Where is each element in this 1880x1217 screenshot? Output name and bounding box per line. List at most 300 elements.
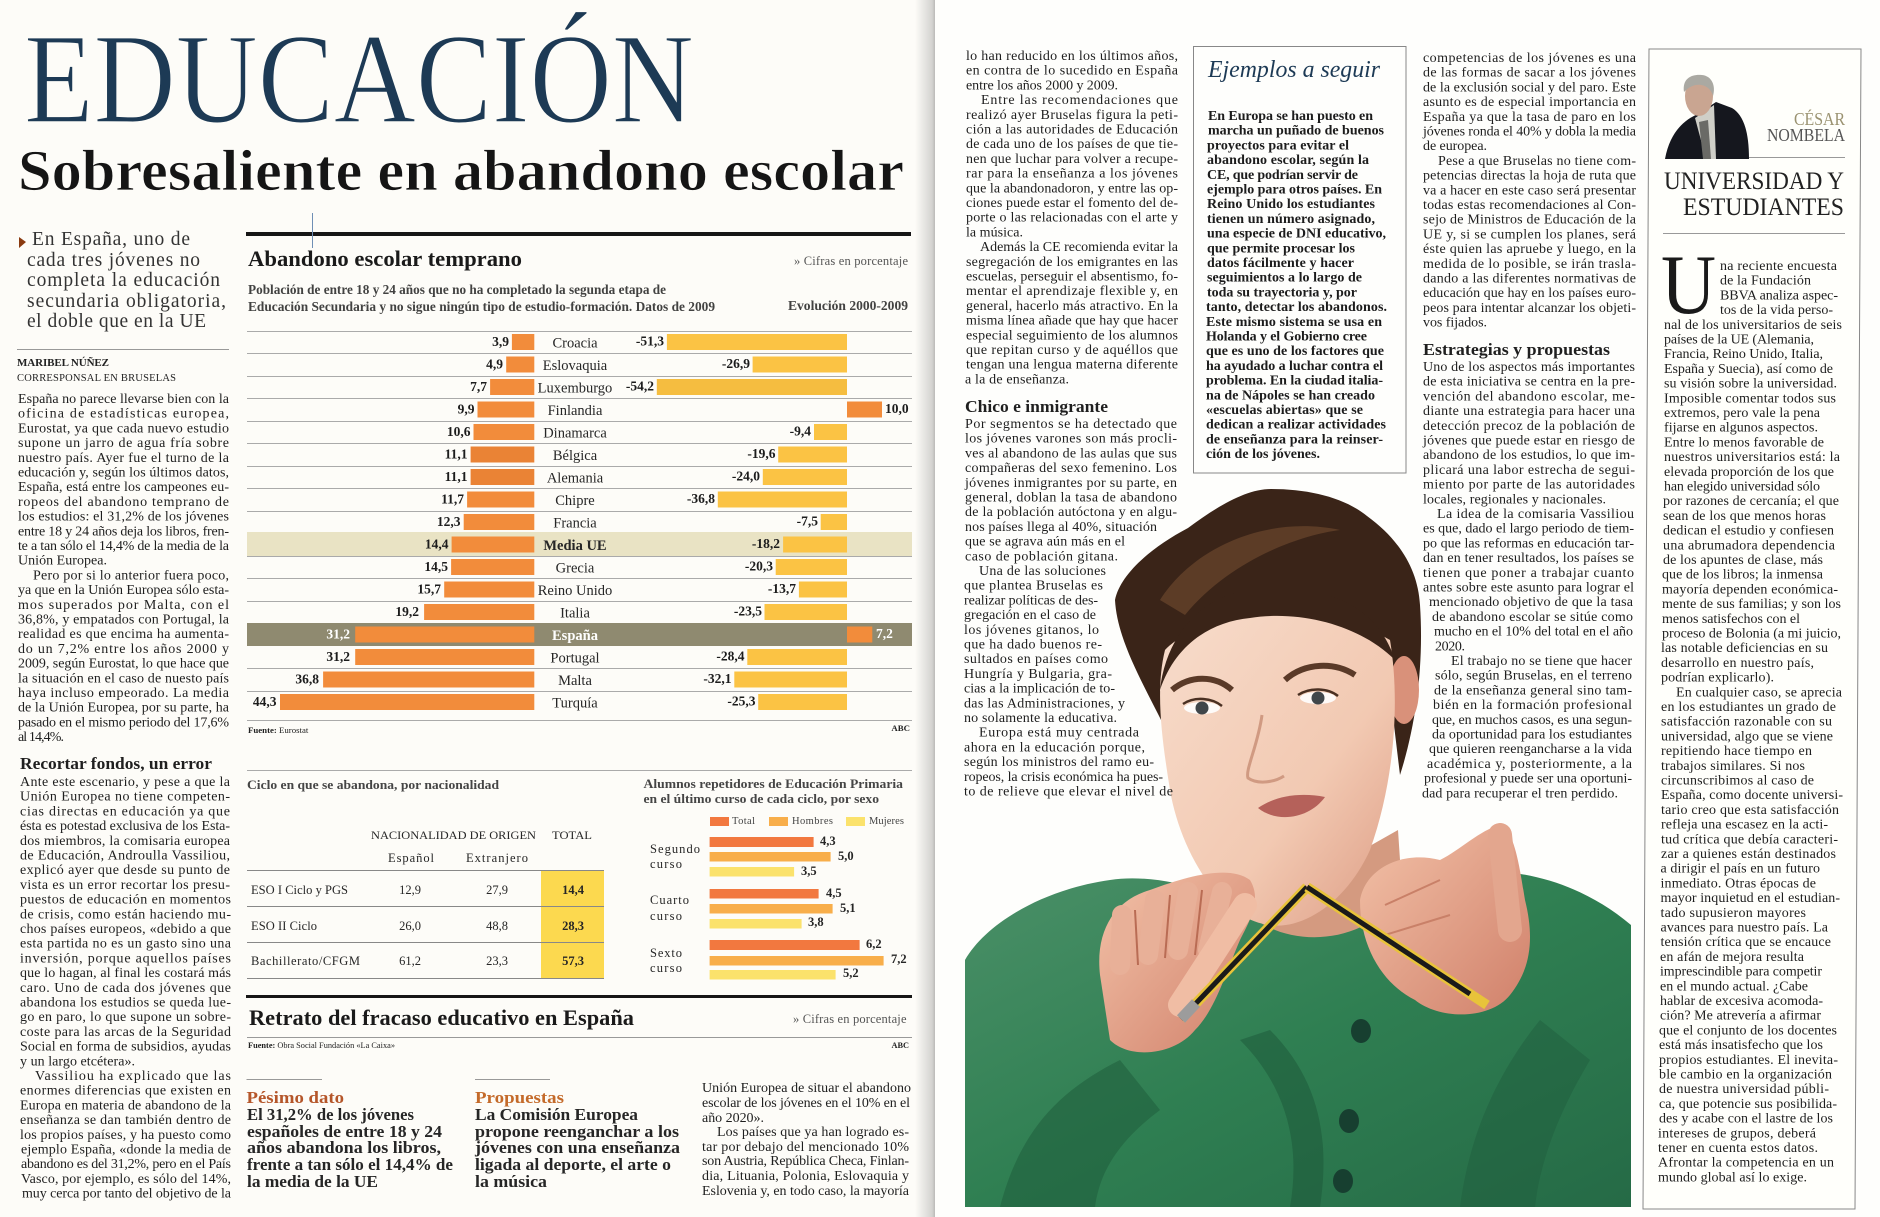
article column 1: los estudios: el 31,2% de los jóvenes: [18, 510, 229, 525]
section heading: retrato del fracaso: ABC: [891, 1041, 909, 1050]
bar chart: abandono escolar temprano: -54,2: [626, 378, 654, 394]
bar chart: abandono escolar temprano: Eslovaquia: [543, 358, 608, 374]
article column 2 continued: Hungría y Bulgaria, gra-: [964, 667, 1112, 682]
legend: Hombres: [792, 816, 833, 827]
article column 1 continued: enseñanza se dan también dentro de: [20, 1113, 231, 1128]
article column 1 continued: ejemplo España, «donde la media de: [21, 1142, 231, 1158]
section heading: retrato del fracaso: » Cifras en porcentaje: [793, 1012, 907, 1026]
article column 3: educación que hay en los países euro-: [1423, 286, 1636, 301]
bar chart: abandono escolar temprano: 14,4: [425, 536, 449, 552]
article column 3 continued: locales, regionales y nacionales.: [1423, 492, 1606, 507]
article column 2: en contra de lo sucedido en España: [966, 64, 1179, 79]
bar chart: abandono escolar temprano: 7,2: [876, 626, 893, 641]
callout: pésimo dato: años abandona los libros,: [247, 1138, 441, 1157]
article column 2 continued: cias a la implicación de to-: [964, 682, 1115, 697]
opinion text: na reciente encuesta: [1720, 259, 1838, 274]
callout: propuestas: ligada al deporte, el arte o: [475, 1155, 671, 1174]
source note: Fuente: Eurostat: [248, 725, 309, 735]
article column 1 continued: Ante este escenario, y pese a que la: [20, 775, 231, 790]
table: ciclo por nacionalidad: 26,0: [399, 919, 421, 933]
bar chart: abandono escolar temprano: -23,5: [734, 604, 762, 618]
chart header: Educación Secundaria y no sigue ningún tipo de estudio-formación. Datos de 2009: [248, 299, 715, 314]
article column 3 continued: profesional y puede ser una oportuni-: [1424, 772, 1632, 787]
panel: Ejemplos a seguir: seguimientos a lo largo de: [1207, 271, 1362, 286]
opinion text: mundo global así lo exige.: [1658, 1170, 1807, 1185]
opinion text: fijarse en algunos aspectos.: [1664, 421, 1818, 436]
article column 3: de la exclusión social y del paro. Este: [1423, 80, 1636, 95]
callout: propuestas: la música: [475, 1172, 547, 1191]
article column 3 continued: vención del abandono escolar, me-: [1423, 389, 1635, 404]
icon: bullet arrow: [19, 237, 26, 248]
article column 3 continued: mucho en el 10% del total en el año: [1434, 625, 1633, 640]
intro summary: [19, 229, 226, 332]
chart header: Abandono escolar temprano: [248, 246, 522, 271]
panel: Ejemplos a seguir: ejemplo para otros países. En: [1207, 182, 1382, 198]
bar chart: abandono escolar temprano: -32,1: [703, 671, 732, 686]
bar chart: alumnos repetidores: 4,5: [826, 886, 842, 900]
bar chart: abandono escolar temprano: 15,7: [417, 582, 441, 596]
callout: pésimo dato: frente a tan sólo el 14,4% de: [247, 1155, 453, 1174]
article column 1 continued: y un largo etcétera».: [20, 1054, 135, 1069]
panel: Ejemplos a seguir: de enseñanza para la reinser-: [1206, 432, 1383, 447]
article column 2: general, hacerlo más atractivo. En la: [966, 299, 1179, 314]
article column 1 continued: enormes diferencias que existen en: [20, 1084, 231, 1099]
article column 3: asunto es de especial importancia en: [1423, 95, 1636, 110]
photo: student snapping a pencil: [965, 489, 1631, 1207]
opinion text: Francia, Reino Unido, Italia,: [1664, 347, 1823, 362]
panel: Ejemplos a seguir: datos fácilmente y hacer: [1207, 256, 1354, 271]
article column 1 continued: Vasco, por ejemplo, es sólo del 14%,: [21, 1172, 231, 1187]
nose: [1248, 715, 1284, 782]
opinion text: su visión sobre la universidad.: [1664, 377, 1837, 392]
article column 2 continued: [964, 417, 1177, 800]
bar chart: abandono escolar temprano: -9,4: [790, 424, 811, 438]
bar chart: abandono escolar temprano: -7,5: [797, 514, 818, 528]
article column 3: vos fijados.: [1423, 316, 1487, 331]
table: ciclo por nacionalidad: ESO I Ciclo y PGS: [251, 883, 348, 897]
article column 3 continued: que, en muchos casos, es una segun-: [1432, 713, 1632, 728]
subtitle: Sobresaliente en abandono escolar: [18, 138, 904, 203]
article column 1: 2009, según Eurostat, lo que hace que: [18, 657, 229, 672]
heading: Chico e inmigrante: Chico e inmigrante: [965, 397, 1108, 416]
article column 3 continued: El trabajo no se tiene que hacer: [1451, 654, 1632, 669]
article column 3: sejo de Ministros de Educación de la: [1423, 213, 1637, 228]
bar chart: abandono escolar temprano: -18,2: [752, 536, 780, 551]
article text bottom right of left page: tar por debajo del mencionado 10%: [702, 1140, 909, 1155]
hair: [1115, 489, 1421, 775]
article column 3 continued: bién en la formación profesional: [1433, 698, 1632, 713]
article column 2 continued: das las Administraciones, y: [964, 696, 1125, 711]
article column 2: lo han reducido en los últimos años,: [966, 49, 1178, 64]
opinion text: mente de sus familias; y son los: [1662, 597, 1841, 612]
callout: pésimo dato: El 31,2% de los jóvenes: [247, 1105, 415, 1124]
article column 2 continued: los jóvenes gitanos, lo: [964, 623, 1099, 638]
bar chart: alumnos repetidores: en el último curso de cada ciclo, por sexo: [644, 791, 879, 806]
bar chart: abandono escolar temprano: 11,7: [441, 492, 464, 506]
article column 1 continued: chos países europeos, «debido a que: [20, 922, 231, 937]
article column 1 continued: ésta es potestad exclusiva de los Esta-: [20, 819, 230, 834]
article column 1: Unión Europea.: [18, 554, 107, 569]
bar chart: abandono escolar temprano: -36,8: [687, 491, 715, 506]
chart header: [246, 213, 911, 314]
opinion text: está más insatisfecho que los: [1659, 1038, 1823, 1053]
bar chart: alumnos repetidores: Cuarto: [650, 893, 689, 907]
article text bottom right of left page: Unión Europea de situar el abandono: [702, 1081, 911, 1096]
article text bottom right of left page: dia, Lituania, Polonia, Eslovaquia y: [702, 1169, 909, 1184]
panel: Ejemplos a seguir: abandono escolar, según la: [1207, 153, 1369, 168]
callout: propuestas: jóvenes con una enseñanza: [474, 1138, 680, 1157]
bar chart: abandono escolar temprano: -20,3: [745, 558, 773, 574]
byline: CORRESPONSAL EN BRUSELAS: [17, 373, 176, 384]
panel: Ejemplos a seguir: problema. En la ciudad italia-: [1206, 374, 1383, 389]
hair fringe: [1160, 589, 1395, 690]
article column 3: medida de lo posible, se irán trasla-: [1423, 257, 1636, 272]
opinion text: tener en cuenta estos datos.: [1658, 1141, 1818, 1156]
article column 2: misma línea añade que hay que hacer: [966, 314, 1178, 329]
opinion text: intereses de grupos, deberá: [1658, 1126, 1817, 1141]
opinion text: tario creo que esta satisfacción: [1661, 803, 1839, 818]
table: ciclo por nacionalidad: 12,9: [399, 883, 421, 897]
bar chart: abandono escolar temprano: 19,2: [395, 604, 419, 619]
bar chart: abandono escolar temprano: Alemania: [547, 470, 604, 486]
article column 2: Entre las recomendaciones que: [981, 93, 1178, 108]
article column 1: de la Unión Europea, por su parte, ha: [18, 701, 230, 716]
article column 2 continued: compañeras del sexo femenino. Los: [965, 461, 1177, 476]
opinion text: sean de los que menos horas: [1663, 509, 1826, 524]
article column 3: jóvenes ronda el 40% y dobla la media: [1422, 124, 1637, 140]
opinion text: ca, que potencie sus posibilida-: [1659, 1097, 1837, 1112]
article column 1: ropeos del abandono temprano de: [18, 495, 229, 510]
article column 1 continued: que lo hagan, al final les costará más: [20, 966, 231, 981]
article column 1 continued: Social en forma de subsidios, ayudas: [20, 1040, 231, 1055]
article column 3 continued: de la enseñanza general sino tam-: [1434, 683, 1632, 698]
drop cap: U: [1661, 238, 1716, 332]
article column 1: pasado en el mismo periodo del 17,6%: [18, 715, 229, 730]
table: ciclo por nacionalidad: Ciclo en que se abandona, por nacionalidad: [247, 777, 500, 792]
article column 3 continued: que quieren reengancharse a la vida: [1429, 742, 1633, 757]
article column 2: de cada uno de los países de que tie-: [966, 137, 1178, 152]
article column 1 continued: muy cerca por tanto del objetivo de la: [22, 1187, 232, 1202]
bar chart: abandono escolar temprano: 9,9: [458, 402, 475, 416]
bar chart: alumnos repetidores: [644, 776, 907, 980]
opinion text: en los estudiantes un grado de: [1661, 700, 1836, 715]
opinion text: refleja una escasez en la acti-: [1661, 818, 1828, 833]
article column 2: especial seguimiento de los alumnos: [966, 328, 1178, 343]
opinion text: BBVA analiza aspec-: [1720, 288, 1838, 303]
bar chart: abandono escolar temprano: Croacia: [552, 336, 598, 352]
section heading: retrato del fracaso: [246, 995, 912, 1050]
article column 2 continued: de la población autóctona y en algu-: [965, 505, 1177, 520]
article column 2 continued: gregación en el caso de: [964, 608, 1096, 623]
article column 3 continued: sólo, según Bruselas, en el terreno: [1435, 669, 1632, 684]
article column 1 continued: coste para las arcas de la Seguridad: [20, 1025, 231, 1040]
bar chart: alumnos repetidores: curso: [650, 909, 682, 923]
article column 2: entre los años 2000 y 2009.: [966, 78, 1118, 93]
chart header: Población de entre 18 y 24 años que no ha completado la segunda etapa de: [248, 282, 666, 297]
article column 2 continued: ahora en la educación porque,: [964, 740, 1145, 755]
article column 1: Pero por si lo anterior fuera poco,: [33, 568, 229, 583]
table: ciclo por nacionalidad: [247, 777, 604, 979]
panel: Ejemplos a seguir: En Europa se han puesto en: [1208, 109, 1373, 124]
opinion text: ción? Me atrevería a afirmar: [1660, 1009, 1821, 1024]
bar chart: abandono escolar temprano: Malta: [558, 673, 592, 689]
title: EDUCACIÓN: [24, 7, 694, 150]
heading: Estrategias y propuestas: Estrategias y propuestas: [1423, 340, 1610, 359]
callout: pésimo dato: españoles de entre 18 y 24: [247, 1122, 442, 1141]
opinion text: de los apuntes de clase, más: [1663, 553, 1823, 568]
left hand: [1099, 873, 1255, 1052]
opinion text: de nuestra universidad públi-: [1659, 1082, 1829, 1097]
article column 2: porte o las relacionadas con el arte y: [966, 211, 1178, 226]
bar chart: abandono escolar temprano: 44,3: [253, 694, 277, 709]
article column 1 continued: Vassiliou ha explicado que las: [35, 1069, 231, 1084]
article column 1: ya que en la Unión Europea sólo esta-: [18, 583, 229, 598]
callout: pésimo dato: Pésimo dato: [246, 1088, 344, 1107]
legend: Total: [732, 816, 755, 827]
opinion text: trabajos similares. Si nos: [1661, 759, 1805, 774]
article column 2: mentar el aprendizaje flexible y, en: [966, 284, 1178, 299]
table: ciclo por nacionalidad: ESO II Ciclo: [251, 919, 317, 933]
panel: Ejemplos a seguir: que permite procesar los: [1207, 241, 1356, 256]
article column 3 continued: es que, dado el largo periodo de tiem-: [1423, 522, 1634, 537]
bar chart: abandono escolar temprano: Finlandia: [548, 403, 603, 419]
bar chart: abandono escolar temprano: 11,1: [445, 469, 468, 484]
opinion text: en el mundo actual. ¿Cabe: [1660, 979, 1808, 994]
article column 2: tengan una lengua materna diferente: [966, 358, 1178, 373]
article column 1 continued: explicó ayer que desde su punto de: [20, 863, 230, 878]
article column 3 continued: tienen que poner a trabajar cuanto: [1423, 566, 1634, 581]
bar chart: alumnos repetidores: curso: [650, 961, 682, 975]
callout: propuestas: propone reenganchar a los: [475, 1122, 680, 1141]
article column 2: la música.: [966, 225, 1023, 240]
bar chart: abandono escolar temprano: Media UE: [543, 538, 607, 554]
intro summary: En España, uno de: [32, 229, 190, 250]
bar chart: abandono escolar temprano: 31,2: [326, 626, 350, 642]
article column 3 continued: de abandono escolar se sitúe como: [1432, 610, 1633, 625]
mouth: [1258, 795, 1325, 817]
opinion text: tensión crítica que se encauce: [1660, 935, 1831, 950]
article column 2 continued: jóvenes inmigrantes por su parte, en: [964, 476, 1177, 491]
article column 2 continued: ves al abandono de las aulas que sus: [965, 446, 1177, 461]
opinion text: las notable deficiencias en su: [1661, 641, 1828, 656]
bar chart: abandono escolar temprano: -24,0: [732, 468, 760, 484]
bar chart: abandono escolar temprano: [247, 331, 912, 721]
panel: Ejemplos a seguir: proyectos para evitar el: [1207, 138, 1349, 153]
article column 1 continued: caro. Uno de cada dos jóvenes que: [20, 981, 231, 996]
opinion text: inmediato. Otras épocas de: [1660, 876, 1816, 891]
bar chart: abandono escolar temprano: 31,2: [326, 649, 350, 664]
bar chart: abandono escolar temprano: 3,9: [492, 334, 509, 349]
opinion text: que de los libros; la inmensa: [1662, 568, 1824, 583]
panel: Ejemplos a seguir: Reino Unido los estudiantes: [1207, 197, 1376, 212]
bar chart: abandono escolar temprano: Turquía: [552, 696, 598, 712]
article column 2 continued: que se agrava aún más en el: [965, 535, 1125, 550]
opinion text: mayor inquietud en el estudian-: [1660, 891, 1840, 906]
opinion text: países de la UE (Alemania,: [1664, 332, 1814, 348]
article column 2 continued: to de relieve que elevar el nivel de: [964, 784, 1173, 800]
author name: [1749, 109, 1845, 158]
opinion text: a dirigir el país en un futuro: [1660, 862, 1820, 877]
opinion text: repitiendo hace tiempo en: [1661, 744, 1812, 759]
article column 3: dando a las diferentes normativas de: [1423, 272, 1636, 286]
article column 2 continued: caso de población gitana.: [965, 549, 1118, 564]
bar chart: alumnos repetidores: 5,1: [840, 901, 856, 915]
table: ciclo por nacionalidad: Extranjero: [466, 851, 528, 865]
table: ciclo por nacionalidad: Español: [388, 851, 435, 865]
bar chart: abandono escolar temprano: -13,7: [768, 581, 796, 596]
table: ciclo por nacionalidad: 23,3: [486, 954, 508, 968]
article column 3 continued: mencionado objetivo de que la tasa: [1429, 595, 1634, 610]
eyes and brows: [1172, 666, 1355, 714]
article column 1: entre 18 y 24 años deja los libros, fren-: [18, 524, 229, 539]
article column 3: peos para intentar alcanzar los objeti-: [1423, 301, 1636, 316]
article column 1 continued: Europa en materia de abandono de la: [20, 1098, 232, 1113]
article text bottom right of left page: año 2020».: [702, 1111, 764, 1126]
opinion text: imprescindible para competir: [1660, 965, 1822, 980]
callout: pésimo dato: la media de la UE: [247, 1172, 378, 1191]
chart header: » Cifras en porcentaje: [794, 254, 908, 268]
opinion text: elevada proporción de los que: [1664, 465, 1834, 480]
panel: Ejemplos a seguir: marcha un puñado de buenos: [1208, 124, 1385, 139]
opinion text: [1658, 259, 1843, 1185]
table: ciclo por nacionalidad: 28,3: [562, 919, 584, 933]
bar chart: alumnos repetidores: 5,0: [838, 849, 854, 863]
bar chart: abandono escolar temprano: Reino Unido: [538, 583, 612, 599]
article column 2 continued: que ha dado buenos re-: [964, 638, 1102, 652]
byline: MARIBEL NÚÑEZ: [17, 357, 109, 369]
article column 3 continued: diante una estrategia para hacer una: [1423, 404, 1636, 419]
panel: Ejemplos a seguir: tienen un número asignado,: [1207, 212, 1375, 227]
opinion text: propios estudiantes. El inevita-: [1659, 1053, 1838, 1068]
panel: Ejemplos a seguir: una especie de DNI educativo,: [1207, 227, 1386, 242]
table: ciclo por nacionalidad: TOTAL: [552, 828, 592, 842]
article column 2: nen que luchar para volver a recupe-: [966, 152, 1178, 167]
article column 2: que repitan curso y de aquéllos que: [966, 343, 1178, 358]
article column 3 continued: [1422, 360, 1636, 801]
article column 2 continued: ropeos, la crisis económica ha pues-: [964, 770, 1163, 785]
article column 2: que la abandonadoron, y entre las op-: [966, 181, 1178, 196]
bar chart: abandono escolar temprano: -51,3: [636, 334, 664, 348]
article column 2: escuelas, perseguir el absentismo, fo-: [966, 270, 1178, 284]
article column 1 continued: abandono es del 31,2%, pero en el País: [21, 1157, 231, 1172]
panel: Ejemplos a seguir: dedican a realizar actividades: [1206, 418, 1387, 433]
bar chart: abandono escolar temprano: 10,6: [447, 424, 471, 439]
opinion text: zar a quienes están destinados: [1661, 847, 1836, 862]
article column 2 continued: los jóvenes varones son más procli-: [965, 432, 1177, 447]
opinion heading: UNIVERSIDAD Y: [1664, 168, 1844, 195]
article column 2: ción a las autoridades de Educación: [966, 122, 1178, 138]
source note: [248, 723, 910, 735]
article column 1: do un 7,2% entre los años 2000 y: [18, 642, 229, 657]
opinion text: circunscribimos al caso de: [1661, 774, 1814, 788]
article column 3: Pese a que Bruselas no tiene com-: [1438, 154, 1636, 169]
article column 2: Además la CE recomienda evitar la: [980, 240, 1179, 255]
bar chart: abandono escolar temprano: 10,0: [885, 401, 909, 416]
byline: [17, 357, 176, 384]
article column 3 continued: detección precoz de la población de: [1423, 419, 1635, 434]
panel: Ejemplos a seguir: que es uno de los factores que: [1206, 344, 1384, 359]
article column 3 continued: académica y, posteriormente, a la: [1427, 757, 1633, 772]
section heading: retrato del fracaso: Retrato del fracaso educativo en España: [249, 1005, 634, 1030]
article column 1: al 14,4%.: [18, 730, 64, 745]
bar chart: abandono escolar temprano: -19,6: [747, 446, 776, 461]
opinion text: menos satisfechos con el: [1662, 612, 1800, 627]
article column 3: España ya que la tasa de paro en los: [1423, 110, 1636, 125]
article column 2 continued: según los ministros del ramo eu-: [964, 755, 1154, 770]
intro summary: cada tres jóvenes no: [27, 250, 200, 271]
bar chart: abandono escolar temprano: 4,9: [486, 356, 503, 372]
article column 2: segregación de los emigrantes en las: [966, 255, 1178, 270]
panel: Ejemplos a seguir: ha ayudado a luchar contra el: [1206, 359, 1383, 374]
opinion text: una abrumadora dependencia: [1663, 538, 1836, 553]
opinion text: de la Fundación: [1720, 274, 1811, 289]
legend: Mujeres: [869, 816, 904, 827]
article column 3 continued: antes sobre este asunto para lograr el: [1423, 580, 1634, 596]
panel: Ejemplos a seguir: Holanda y el Gobierno cree: [1206, 330, 1367, 344]
article column 1: nuestro país. Ayer fue el turno de la: [18, 451, 230, 466]
legend: [710, 816, 904, 827]
article column 3: de europea.: [1423, 139, 1487, 154]
article column 1: educación y, según los últimos datos,: [18, 466, 229, 480]
article column 2 continued: Por segmentos se ha detectado que: [965, 417, 1177, 432]
article column 1: Eurostat, ya que cada nuevo estudio: [18, 421, 229, 436]
article column 2 continued: realizar políticas de des-: [964, 593, 1098, 608]
opinion text: España, como docente universi-: [1661, 788, 1843, 803]
article column 3: petencias directas la hoja de ruta que: [1423, 169, 1636, 184]
opinion text: avances para nuestro país. La: [1660, 920, 1829, 936]
bar chart: abandono escolar temprano: -25,3: [727, 694, 756, 708]
opinion text: podrían explicarlo).: [1661, 671, 1774, 686]
article column 3 continued: plicará una labor estrecha de segui-: [1423, 463, 1635, 478]
bar chart: alumnos repetidores: 5,2: [843, 966, 859, 980]
panel: Ejemplos a seguir: Este mismo sistema se usa en: [1206, 315, 1382, 330]
table: ciclo por nacionalidad: 57,3: [562, 954, 584, 968]
article column 3 continued: de esta iniciativa se centra en la pre-: [1423, 375, 1635, 390]
bar chart: abandono escolar temprano: Grecia: [556, 560, 595, 576]
opinion text: dedican el estudio y confiesen: [1663, 524, 1834, 539]
opinion text: nuestros universitarios está: la: [1664, 450, 1841, 465]
bar chart: abandono escolar temprano: 36,8: [295, 672, 319, 686]
bar chart: abandono escolar temprano: Luxemburgo: [538, 380, 612, 396]
table: ciclo por nacionalidad: 27,9: [486, 883, 508, 897]
article column 1: España, está entre los campeones eu-: [18, 480, 229, 495]
bar chart: alumnos repetidores: Sexto: [650, 946, 682, 960]
article column 1: la situación en el caso de nuesto país: [18, 671, 229, 686]
article column 1: [18, 392, 230, 745]
source note: ABC: [891, 723, 910, 733]
opinion text: proceso de Bolonia (a mi juicio,: [1662, 626, 1841, 642]
bar chart: abandono escolar temprano: Portugal: [550, 650, 600, 666]
article text bottom right of left page: [702, 1081, 911, 1199]
article column 1: supone un jarro de agua fría sobre: [18, 436, 229, 451]
panel: opinion column: [1643, 49, 1861, 1209]
article column 3: éste quien las apruebe y luego, en la: [1423, 242, 1637, 257]
bar chart: alumnos repetidores: curso: [650, 857, 682, 871]
article column 1: mos superados por Malta, con el: [18, 598, 229, 613]
callout: pésimo dato: [246, 1079, 453, 1191]
opinion heading: ESTUDIANTES: [1683, 194, 1844, 221]
article column 1 continued: Unión Europea no tiene competen-: [20, 790, 230, 805]
article text bottom right of left page: escolar de los jóvenes en el 10% en el: [702, 1096, 910, 1111]
opinion text: En cualquier caso, se aprecia: [1676, 685, 1843, 700]
article column 1 continued: los propios países, y ha puesto como: [20, 1128, 231, 1143]
article column 1 continued: de Educación, Androulla Vassiliou,: [20, 848, 230, 864]
bar chart: abandono escolar temprano: Dinamarca: [543, 426, 607, 442]
article column 2 continued: general, doblan la tasa de abandono: [965, 490, 1177, 506]
article column 3 continued: dan en tener resultados, los países se: [1423, 551, 1634, 566]
bar chart: abandono escolar temprano: 12,3: [437, 514, 461, 529]
bar chart: abandono escolar temprano: Bélgica: [553, 448, 598, 464]
